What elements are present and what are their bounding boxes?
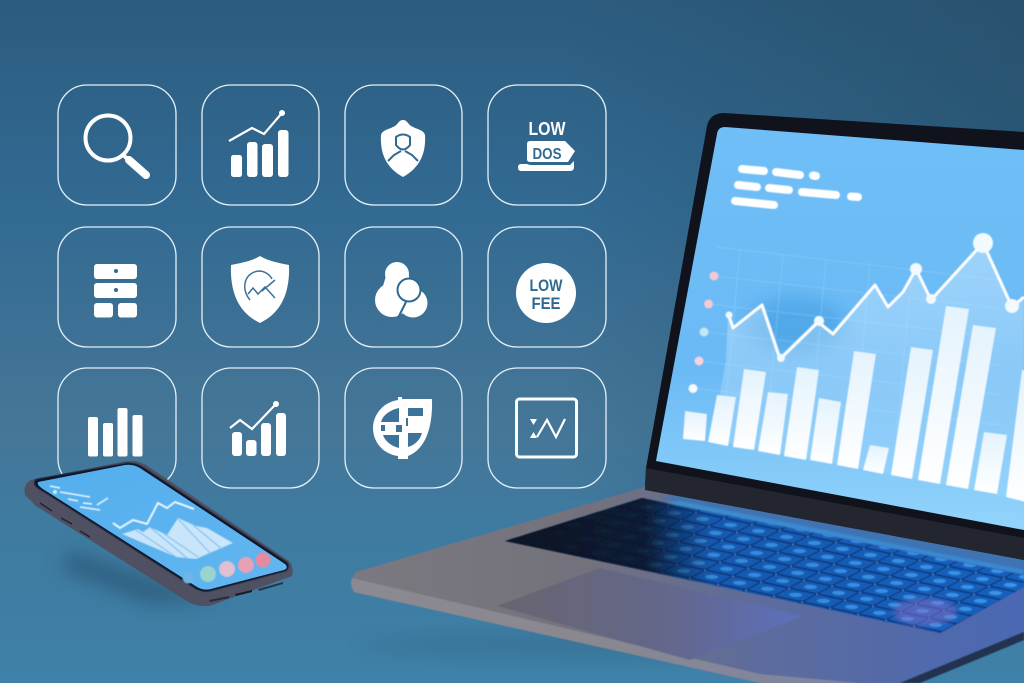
- laptop base: [351, 487, 1024, 683]
- laptop screen: [656, 127, 1024, 530]
- trackpad: [497, 568, 803, 660]
- keyboard: [505, 498, 1024, 633]
- phone chart: [50, 486, 270, 584]
- base right dark edge: [900, 632, 1024, 683]
- icon tile: low DOS tag: DOS: [532, 146, 562, 163]
- icon tile: bars with trend line: [202, 368, 319, 488]
- laptop: [351, 113, 1024, 683]
- phone: [25, 461, 293, 606]
- icon tile: shield with gauge: [202, 227, 319, 347]
- phone status dot: [53, 490, 57, 494]
- icon tile: simple bars: [58, 368, 176, 488]
- chart side dots: [688, 272, 718, 393]
- icon tile: low fee badge: FEE: [532, 294, 560, 313]
- phone bars: [122, 518, 233, 559]
- icon tile: low fee badge: [488, 227, 606, 347]
- icon tile: rising bar chart: [202, 85, 319, 205]
- phone port and speakers: [209, 582, 283, 602]
- shadow: laptop on desk: [360, 631, 840, 659]
- chart grid: [693, 247, 1000, 478]
- phone body: [25, 461, 293, 606]
- icon tile: low DOS tag: [488, 85, 606, 205]
- chart shaded backdrop: [745, 297, 845, 353]
- icon tile: blob circles: [345, 227, 462, 347]
- phone screen: [38, 465, 287, 590]
- phone side buttons: [40, 503, 90, 537]
- icon tile: low fee badge: LOW: [530, 276, 563, 295]
- phone trend line: [113, 502, 194, 528]
- phone text lines: [50, 486, 108, 510]
- purple reflection on lower keys: [893, 598, 957, 626]
- screen text lines: [735, 169, 858, 205]
- base back strip lit by screen: [660, 492, 1024, 572]
- phone bar gaps: [136, 519, 222, 558]
- chart trend line: [728, 243, 1024, 359]
- chart nodes: [726, 233, 1019, 362]
- chart area under line: [712, 243, 1024, 500]
- icon tile: person shield: [345, 85, 462, 205]
- icon tile: framed line chart: [488, 368, 606, 488]
- phone bezel: [34, 463, 289, 592]
- icon tile: server rack: [58, 227, 176, 347]
- laptop lid with bezel: [645, 113, 1024, 560]
- glow strip behind keys: [665, 501, 1024, 574]
- icon tile: low DOS tag: LOW: [528, 119, 566, 139]
- chart bars: [683, 306, 1024, 503]
- phone buttons: [182, 552, 270, 584]
- base front edge: [351, 578, 860, 683]
- screen chart: [683, 169, 1024, 503]
- icon grid: [58, 85, 606, 488]
- icon tile: crest shield: [345, 368, 462, 488]
- shadow: phone on desk: [60, 550, 220, 605]
- icon tile: magnifying glass: [58, 85, 176, 205]
